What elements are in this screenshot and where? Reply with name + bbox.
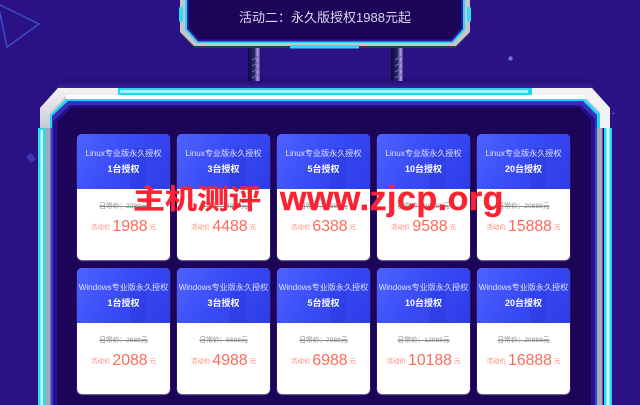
card: Linux 3 seats: 元 (250, 224, 256, 230)
card: Windows 10 seats: 10台授权 (405, 298, 442, 308)
card: Windows 1 seat: 活动价 (91, 358, 110, 365)
card: Windows 3 seats: Windows专业版永久授权 (179, 283, 268, 292)
card: Linux 20 seats (477, 134, 570, 260)
card: Linux 1 seat: 日常价：2288元 (99, 202, 148, 210)
card: Linux 10 seats (377, 134, 470, 260)
card: Linux 1 seat: 元 (150, 224, 156, 230)
card: Windows 1 seat: Windows专业版永久授权 (79, 283, 168, 292)
card: Linux 20 seats: 20台授权 (505, 164, 542, 174)
card: Windows 5 seats: Windows专业版永久授权 (279, 283, 368, 292)
card: Windows 1 seat: 1台授权 (107, 298, 140, 308)
card: Windows 3 seats: 活动价 (191, 358, 210, 365)
card: Linux 10 seats: Linux专业版永久授权 (385, 148, 462, 158)
card: Linux 3 seats: 日常价：4888元 (199, 202, 248, 210)
card: Windows 10 seats (377, 268, 470, 394)
card: Linux 5 seats: Linux专业版永久授权 (285, 148, 362, 158)
card: Linux 5 seats: 日常价：6888元 (299, 202, 348, 210)
card: Linux 1 seat: 活动价 (91, 224, 110, 230)
card: Linux 20 seats: 日常价：20888元 (497, 202, 550, 210)
card: Windows 10 seats: Windows专业版永久授权 (379, 283, 468, 292)
card: Windows 1 seat: 元 (150, 358, 156, 365)
panel: Linux pricing row (76, 134, 570, 262)
card: Linux 5 seats: 6388 (312, 218, 348, 234)
card: Linux 10 seats: 元 (450, 224, 456, 230)
card: Windows 20 seats: 20台授权 (505, 298, 542, 308)
card: Linux 1 seat: 1台授权 (107, 164, 140, 174)
decoration: triangle outline (0, 4, 39, 47)
card: Windows 20 seats (477, 268, 570, 394)
card: Windows 3 seats (177, 268, 270, 394)
card: Windows 5 seats: 元 (350, 358, 356, 365)
card: Linux 20 seats: Linux专业版永久授权 (485, 148, 562, 158)
card: Windows 10 seats: 日常价：12988元 (397, 337, 450, 344)
card: Windows 20 seats: 16888 (508, 352, 552, 369)
card: Linux 5 seats: 元 (350, 224, 356, 230)
card: Windows 5 seats: 5台授权 (307, 298, 340, 308)
card: Windows 5 seats: 日常价：7988元 (299, 337, 348, 344)
card: Linux 20 seats: 15888 (508, 218, 552, 234)
panel: Windows pricing row (76, 268, 570, 396)
card: Windows 10 seats: 元 (454, 358, 460, 365)
banner title: 活动二：永久版授权1988元起 (239, 10, 411, 25)
card: Windows 1 seat: 2088 (112, 352, 148, 369)
main frame shadow cap (56, 75, 594, 88)
card: Linux 1 seat: Linux专业版永久授权 (85, 148, 162, 158)
card: Linux 3 seats: Linux专业版永久授权 (185, 148, 262, 158)
card: Linux 10 seats: 活动价 (391, 224, 410, 230)
card: Windows 20 seats: Windows专业版永久授权 (479, 283, 568, 292)
card: Linux 5 seats (277, 134, 370, 260)
card: Linux 20 seats: 活动价 (487, 224, 506, 230)
card: Linux 10 seats: 10台授权 (405, 164, 442, 174)
card: Windows 20 seats: 活动价 (487, 358, 506, 365)
card: Linux 5 seats: 5台授权 (307, 164, 340, 174)
watermark: site URL: www.zjcp.org (280, 180, 504, 218)
card: Windows 3 seats: 3台授权 (207, 298, 240, 308)
banner poles (248, 48, 403, 81)
card: Linux 1 seat (77, 134, 170, 260)
card: Windows 20 seats: 日常价：20988元 (497, 337, 550, 344)
card: Windows 3 seats: 元 (250, 358, 256, 365)
card: Linux 10 seats: 日常价：10888元 (397, 202, 450, 210)
card: Windows 20 seats: 元 (554, 358, 560, 365)
watermark: Chinese site name: 主机测评 (133, 184, 261, 214)
card: Linux 3 seats: 3台授权 (207, 164, 240, 174)
card: Windows 5 seats: 6988 (312, 352, 348, 369)
card: Windows 10 seats: 活动价 (387, 358, 406, 365)
card: Linux 5 seats: 活动价 (291, 224, 310, 230)
decoration: glowing dots (26, 56, 614, 163)
card: Windows 3 seats: 4988 (212, 352, 248, 369)
card: Windows 5 seats (277, 268, 370, 394)
activity banner frame (179, 0, 471, 48)
card: Linux 3 seats: 4488 (212, 218, 248, 234)
main frame (38, 88, 612, 405)
card: Linux 3 seats: 活动价 (191, 224, 210, 230)
card: Windows 10 seats: 10188 (408, 352, 452, 369)
card: Windows 5 seats: 活动价 (291, 358, 310, 365)
card: Linux 3 seats (177, 134, 270, 260)
card: Windows 1 seat (77, 268, 170, 394)
card: Linux 10 seats: 9588 (412, 218, 448, 234)
card: Windows 3 seats: 日常价：5688元 (199, 337, 248, 344)
card: Linux 20 seats: 元 (554, 224, 560, 230)
card: Linux 1 seat: 1988 (112, 218, 148, 234)
card: Windows 1 seat: 日常价：2688元 (99, 337, 148, 344)
